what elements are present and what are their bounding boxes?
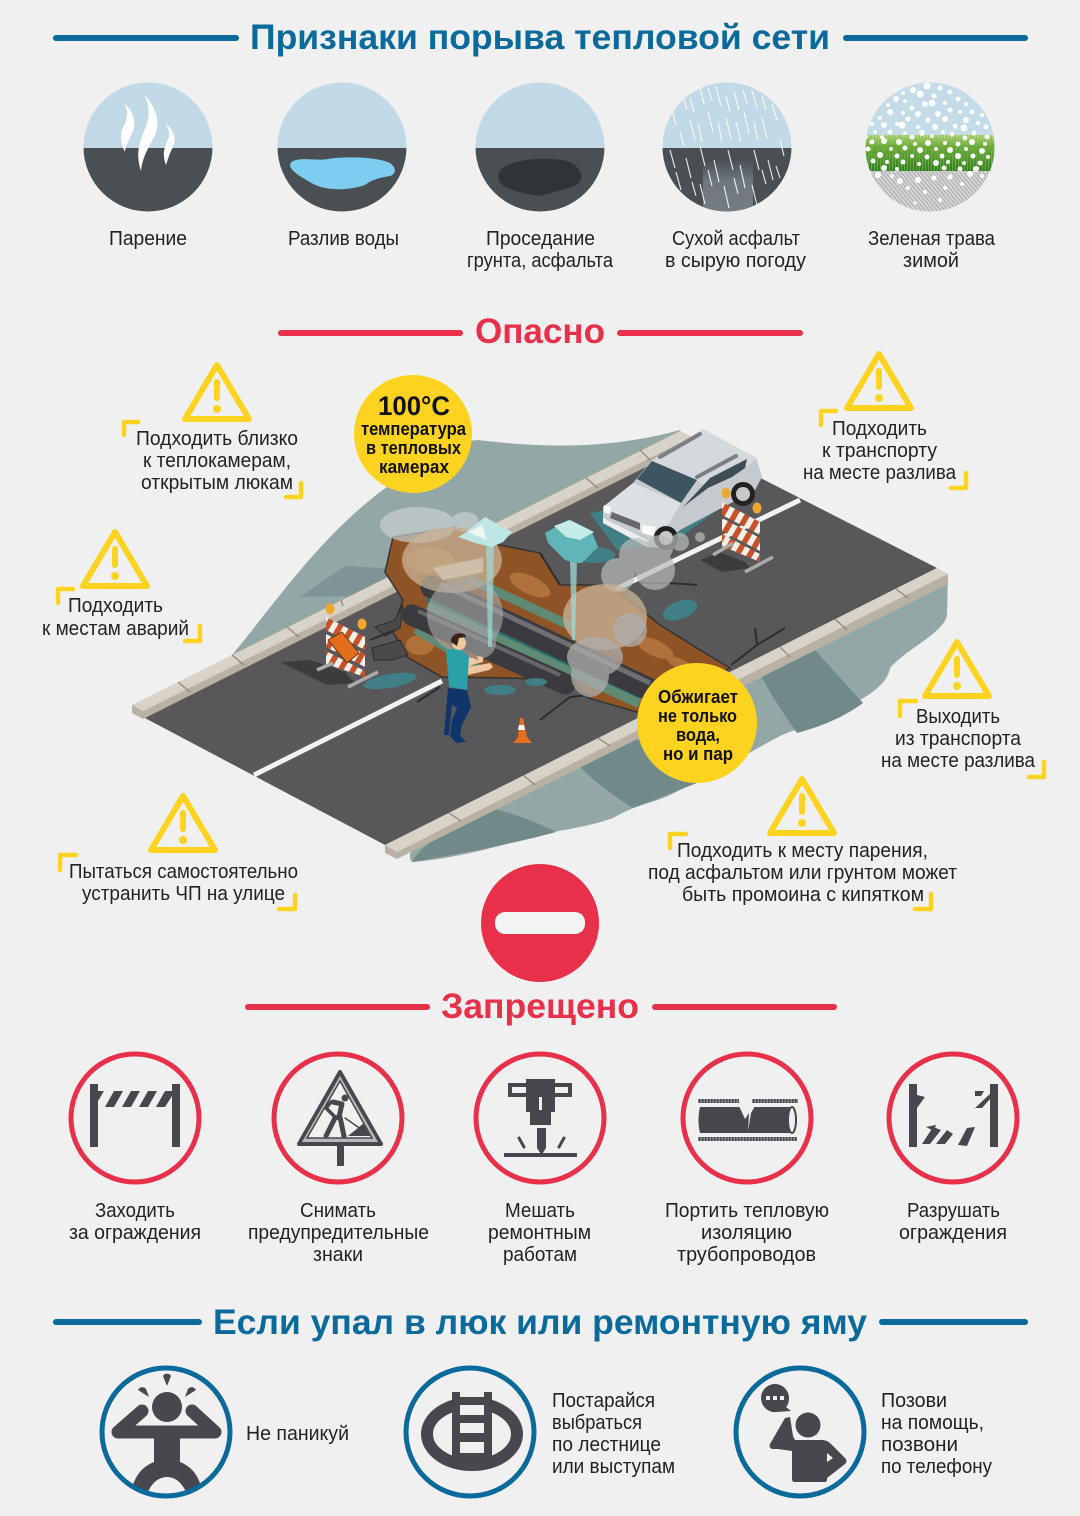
callout: steam burns too xyxy=(637,663,757,783)
label: предупредительные xyxy=(248,1222,429,1244)
car xyxy=(603,429,762,550)
warning: accident sites: Подходить xyxy=(68,595,163,617)
heading: if you fell into a manhole: Если упал в люк или ремонтную яму xyxy=(213,1303,868,1342)
barrier left xyxy=(280,604,378,687)
callout: 100 degrees: 100°C xyxy=(378,391,450,421)
warning: transport at spill: к транспорту xyxy=(822,440,937,462)
callout: 100 degrees: камерах xyxy=(379,457,449,477)
warning: leaving vehicle xyxy=(881,642,1044,777)
warning: leaving vehicle: из транспорта xyxy=(895,728,1022,750)
sign: steam xyxy=(80,80,216,250)
warning: steam spot: быть промоина с кипятком xyxy=(682,884,924,906)
traffic cone xyxy=(513,718,532,743)
water jets xyxy=(458,517,598,647)
label: трубопроводов xyxy=(677,1244,816,1266)
asphalt road xyxy=(143,443,937,845)
soil highlights xyxy=(406,547,695,674)
forbidden: damaging insulation xyxy=(665,1054,829,1266)
sign: dry asphalt in wet weather xyxy=(660,80,806,272)
icon: warning triangle xyxy=(151,796,215,850)
warning: leaving vehicle: Выходить xyxy=(916,706,1000,728)
bottom curb xyxy=(385,568,948,859)
warning: leaving vehicle: на месте разлива xyxy=(881,750,1036,772)
callout: steam burns too: вода, xyxy=(676,725,720,745)
label: на помощь, xyxy=(881,1412,984,1434)
trench with soil xyxy=(385,527,730,712)
warning: open hatches: открытым люкам xyxy=(141,472,293,494)
teal water stain under car xyxy=(590,500,717,550)
water puddles xyxy=(362,547,700,695)
warning: fixing emergency yourself: устранить ЧП на улице xyxy=(82,883,285,905)
warning: open hatches xyxy=(124,365,301,497)
person xyxy=(444,633,493,743)
icon: rain circle xyxy=(660,80,796,214)
icon: warning triangle xyxy=(925,642,989,696)
label: выбраться xyxy=(552,1412,642,1434)
forbidden: destroying fences xyxy=(889,1054,1017,1244)
label: по телефону xyxy=(881,1456,992,1478)
label: Постарайся xyxy=(552,1390,655,1412)
label: Разлив воды xyxy=(288,228,399,250)
label: Снимать xyxy=(300,1200,376,1222)
broken slab xyxy=(433,558,483,580)
label xyxy=(881,1390,992,1478)
icon: fence xyxy=(71,1054,199,1182)
icon: warning triangle xyxy=(847,354,911,408)
heading: danger: Опасно xyxy=(475,312,605,351)
label xyxy=(69,1200,201,1244)
lane marking xyxy=(254,500,800,775)
label: позвони xyxy=(881,1434,958,1456)
icon: warning triangle xyxy=(185,365,249,419)
label xyxy=(665,1200,829,1266)
icon: damaged pipe xyxy=(683,1054,811,1182)
ground under road xyxy=(410,575,948,862)
icon: warning triangle xyxy=(83,532,147,586)
forbidden: removing warning signs xyxy=(248,1054,429,1266)
label: изоляцию xyxy=(701,1222,792,1244)
label: Зеленая трава xyxy=(868,228,996,250)
warning: steam spot: под асфальтом или грунтом может xyxy=(648,862,957,884)
dark ground patch xyxy=(300,566,415,597)
icon: roadworks sign xyxy=(274,1054,402,1182)
callout: 100 degrees xyxy=(354,375,472,493)
warning: transport at spill: на месте разлива xyxy=(803,462,957,484)
icon: subsidence circle xyxy=(476,82,604,212)
icon: puddle circle xyxy=(278,82,406,212)
warning: open hatches: к теплокамерам, xyxy=(143,450,291,472)
label: Мешать xyxy=(505,1200,575,1222)
label: Заходить xyxy=(95,1200,175,1222)
icon: person on the phone xyxy=(736,1368,864,1496)
icon: ladder in manhole xyxy=(406,1368,534,1496)
callout: steam burns too: Обжигает xyxy=(658,687,738,707)
icon: no entry sign xyxy=(481,864,599,982)
label: ремонтным xyxy=(488,1222,591,1244)
top curb xyxy=(132,431,692,719)
label: знаки xyxy=(313,1244,363,1266)
label: грунта, асфальта xyxy=(467,250,614,272)
label: в сырую погоду xyxy=(665,250,806,272)
label: работам xyxy=(503,1244,577,1266)
barrier right xyxy=(700,488,773,572)
icon: jackhammer xyxy=(476,1054,604,1182)
warning: steam spot: Подходить к месту парения, xyxy=(677,840,928,862)
label xyxy=(248,1200,429,1266)
label xyxy=(467,228,614,272)
callout: steam burns too: но и пар xyxy=(663,744,733,764)
asphalt chunks beside trench xyxy=(372,605,408,660)
icon: steam circle xyxy=(80,80,216,214)
warning: steam spot xyxy=(648,779,957,909)
label xyxy=(868,228,996,272)
callout: steam burns too: не только xyxy=(658,706,737,726)
heading: forbidden: Запрещено xyxy=(441,987,639,1026)
warning: accident sites: к местам аварий xyxy=(42,618,189,640)
label: Не паникуй xyxy=(246,1423,349,1445)
label: Портить тепловую xyxy=(665,1200,829,1222)
label: Парение xyxy=(109,228,187,250)
label: за ограждения xyxy=(69,1222,201,1244)
advice: call for help xyxy=(736,1368,992,1496)
warning: fixing emergency yourself: Пытаться самостоятельно xyxy=(69,861,298,883)
callout: 100 degrees: в тепловых xyxy=(366,438,461,458)
advice: climb out by ladder xyxy=(406,1368,675,1496)
label: Разрушать xyxy=(907,1200,1000,1222)
ground behind road xyxy=(232,430,700,680)
cracks xyxy=(370,553,785,720)
sign: water spill xyxy=(278,82,406,249)
label: или выступам xyxy=(552,1456,675,1478)
icon: grass circle xyxy=(866,82,994,212)
label: по лестнице xyxy=(552,1434,661,1456)
warning: open hatches: Подходить близко xyxy=(136,428,298,450)
title: signs of a heating main rupture: Признаки порыва тепловой сети xyxy=(250,18,830,57)
icon: broken fence xyxy=(889,1054,1017,1182)
steam clouds xyxy=(380,507,705,697)
road scene illustration xyxy=(132,429,948,862)
label: ограждения xyxy=(899,1222,1007,1244)
callout: 100 degrees: температура xyxy=(361,419,467,439)
label xyxy=(552,1390,675,1478)
advice: do not panic xyxy=(102,1368,349,1496)
label: Позови xyxy=(881,1390,947,1412)
label: Проседание xyxy=(486,228,595,250)
warning: accident sites xyxy=(42,532,200,641)
label: зимой xyxy=(903,250,959,272)
icon: warning triangle xyxy=(770,779,834,833)
sign: ground subsidence xyxy=(467,80,614,272)
label xyxy=(899,1200,1007,1244)
forbidden: disturbing repair works xyxy=(476,1054,604,1266)
icon: panicking figure xyxy=(102,1368,230,1496)
sign: green grass in winter xyxy=(866,82,995,267)
forbidden: entering the fence xyxy=(69,1054,201,1244)
label: Сухой асфальт xyxy=(672,228,800,250)
heating pipes xyxy=(412,578,657,702)
warning: transport at spill: Подходить xyxy=(832,418,927,440)
label xyxy=(665,228,806,272)
warning: fixing emergency yourself xyxy=(60,796,298,909)
label xyxy=(488,1200,591,1266)
warning: transport at spill xyxy=(803,354,966,488)
